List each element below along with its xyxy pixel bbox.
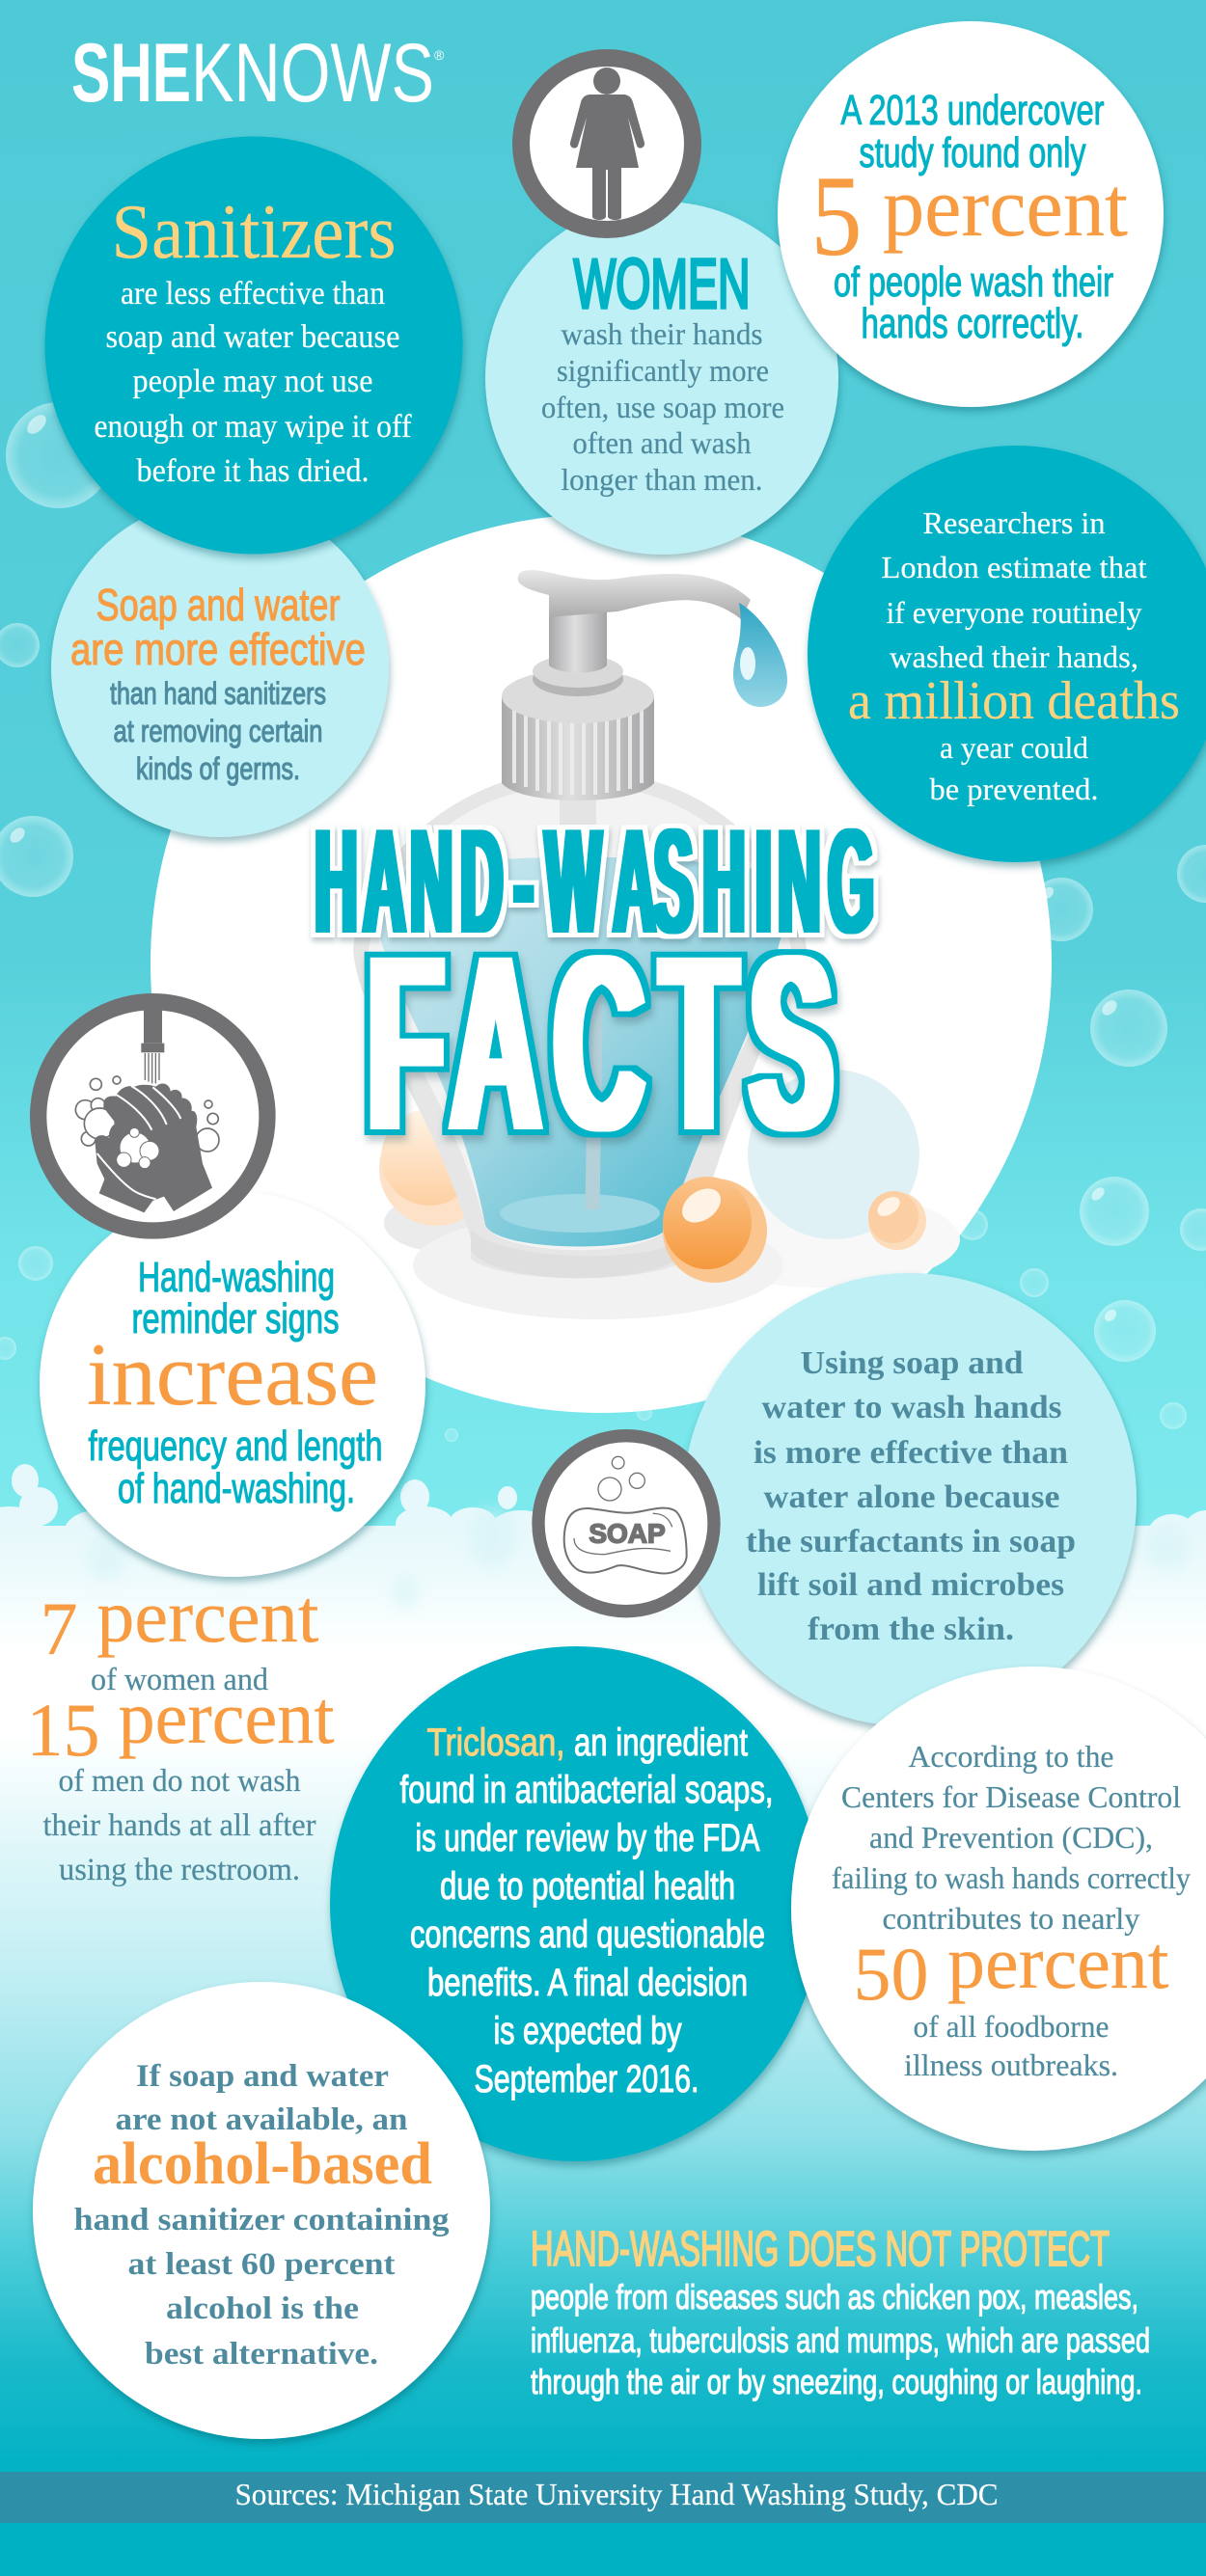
sources band (0, 2472, 1206, 2523)
body text: water alone because (764, 1479, 1059, 1515)
lead text: and Prevention (CDC), (869, 1820, 1153, 1855)
lead text: contributes to nearly (882, 1901, 1140, 1936)
logo: SheKnows: KNOWS (191, 27, 434, 120)
body text: their hands at all after (42, 1808, 316, 1843)
pale large bubble (748, 1070, 919, 1239)
panel: women (485, 202, 838, 555)
logo: SheKnows (71, 27, 445, 120)
closing text: of hand-washing. (118, 1465, 355, 1512)
bottle shadow (384, 1191, 960, 1319)
statistic: percent (928, 1920, 1169, 2004)
body text: is more effective than (754, 1435, 1068, 1471)
icon: hands under faucet (39, 1002, 267, 1231)
body text: from the skin. (808, 1612, 1014, 1647)
lead text (841, 87, 1104, 176)
text: of women and: of women and (91, 1663, 268, 1697)
heading: Sanitizers (112, 190, 396, 275)
sources band: Sources: Michigan State University Hand Washing Study, CDC (235, 2477, 998, 2511)
body text: before it has dried. (137, 453, 369, 489)
closing text: be prevented. (930, 772, 1098, 806)
lead text: Hand-washing (138, 1254, 335, 1301)
closing text (930, 730, 1098, 806)
body text: are less effective than (121, 276, 385, 312)
body text: September 2016. (475, 2058, 699, 2101)
body text: washed their hands, (890, 639, 1138, 674)
panel: 5 percent (778, 21, 1164, 407)
pale orange bubble (379, 1109, 493, 1226)
body text (541, 316, 784, 497)
liquid surface ellipse (500, 1194, 660, 1233)
lead text: study found only (859, 129, 1086, 176)
panel: researchers (808, 446, 1206, 862)
panel: CDC foodborne (791, 1667, 1206, 2151)
bottle base (471, 1230, 687, 1278)
panel: sanitizers (44, 137, 463, 554)
body text: due to potential health (440, 1865, 735, 1908)
closing text (73, 2203, 450, 2372)
body text: water to wash hands (762, 1390, 1061, 1425)
body text: of men do not wash (58, 1764, 301, 1799)
heading (70, 580, 366, 674)
title line: hand-washing: HAND-WASHING (315, 799, 874, 965)
closing text: illness outbreaks. (904, 2047, 1118, 2082)
heading: Soap and water (96, 580, 340, 630)
closing text: at least 60 percent (127, 2247, 396, 2282)
big white circle (151, 514, 1052, 1413)
soap liquid (369, 857, 793, 1246)
body text (110, 676, 326, 786)
lead text: According to the (909, 1739, 1113, 1774)
body text: is expected by (494, 2010, 681, 2052)
heading: are more effective (70, 624, 366, 674)
lead text: A 2013 undercover (841, 87, 1104, 134)
emphasis word: alcohol-based (93, 2131, 432, 2197)
body text: is under review by the FDA (415, 1817, 760, 1859)
body text (531, 2277, 1150, 2401)
body text: often and wash (573, 425, 751, 460)
illustration: soap pump bottle (353, 570, 960, 1319)
logo: SheKnows: SHE (71, 27, 191, 120)
heading: WOMEN (573, 246, 751, 323)
statistic: 15 percent: percent (100, 1675, 335, 1759)
body text: people may not use (133, 364, 372, 399)
body text: often, use soap more (541, 390, 784, 424)
title line: facts: FACTS (368, 905, 833, 1183)
decorative soap bubbles (0, 402, 1206, 1442)
title (315, 799, 874, 1183)
closing text: frequency and length (89, 1423, 382, 1470)
body text (746, 1345, 1076, 1647)
statistic: 15 percent: 15 (27, 1688, 100, 1772)
body text (95, 276, 412, 489)
body text: than hand sanitizers (110, 676, 326, 711)
closing text: alcohol is the (166, 2291, 359, 2326)
lead text (116, 2059, 407, 2137)
lead text: reminder signs (131, 1295, 340, 1342)
lead text: are not available, an (116, 2102, 407, 2137)
lead text: If soap and water (136, 2059, 389, 2094)
statistic: percent (883, 161, 1128, 255)
pump stem (560, 793, 596, 825)
body text: concerns and questionable (410, 1913, 765, 1956)
closing text (834, 258, 1113, 347)
panel: does not protect (531, 2221, 1150, 2401)
body text: lift soil and microbes (757, 1567, 1064, 1603)
closing text: hands correctly. (861, 300, 1084, 347)
glass body (353, 779, 807, 1278)
closing text: hand sanitizer containing (73, 2203, 450, 2237)
emphasis word: increase (87, 1325, 378, 1424)
closing text (89, 1423, 382, 1512)
body text: enough or may wipe it off (95, 409, 412, 445)
pump neck (549, 596, 607, 673)
closing text: of all foodborne (913, 2009, 1110, 2044)
closing text: of people wash their (834, 258, 1113, 306)
soap drip (733, 603, 787, 707)
body text: wash their hands (562, 316, 762, 351)
body text: Researchers in (922, 505, 1106, 540)
statistic (810, 151, 1128, 280)
lead text (832, 1739, 1191, 1936)
statistic: 7 percent: percent (78, 1574, 319, 1658)
body text (882, 505, 1147, 674)
body text: Using soap and (801, 1345, 1024, 1381)
body text: benefits. A final decision (427, 1962, 748, 2004)
closing text (904, 2009, 1118, 2082)
body text (399, 1722, 774, 2101)
body text: if everyone routinely (886, 595, 1142, 630)
body text: at removing certain (114, 714, 322, 748)
icon: soap bar (538, 1436, 714, 1612)
foam and lower background (0, 1464, 1206, 2576)
pump cap (502, 655, 654, 800)
closing text: a year could (940, 730, 1088, 765)
body text: using the restroom. (59, 1853, 300, 1887)
heading word: Triclosan, (426, 1722, 565, 1764)
statistic: 5 (810, 151, 863, 280)
orange bubble large (663, 1177, 767, 1283)
icon: soap bar: SOAP (589, 1518, 666, 1548)
glass inner (369, 793, 791, 1250)
icon: woman figure (521, 58, 693, 230)
pump nozzle (518, 570, 751, 619)
dip tube (592, 964, 596, 1209)
statistic: 50 (853, 1932, 928, 2016)
lead text: failing to wash hands correctly (832, 1860, 1191, 1895)
body text: an ingredient (574, 1722, 748, 1764)
closing text: best alternative. (145, 2337, 378, 2372)
panel: using soap and water (683, 1273, 1137, 1726)
lead text: Centers for Disease Control (841, 1779, 1181, 1814)
statistic: 7 percent: 7 (41, 1586, 78, 1670)
panel: hand-washing reminder signs (40, 1191, 425, 1577)
body text: London estimate that (882, 550, 1147, 584)
lead text (131, 1254, 340, 1342)
body text: found in antibacterial soaps, (399, 1769, 774, 1811)
panel: triclosan (330, 1646, 822, 2161)
logo: SheKnows: ® (434, 47, 445, 63)
panel: soap and water (51, 500, 389, 837)
body text: longer than men. (562, 462, 762, 497)
body text: significantly more (557, 353, 769, 388)
body text: soap and water because (106, 319, 399, 355)
orange bubble small (868, 1191, 926, 1250)
body text (42, 1764, 316, 1887)
body text: kinds of germs. (136, 751, 300, 786)
statistic: a million deaths (848, 671, 1180, 731)
panel: alcohol-based sanitizer (33, 1982, 490, 2439)
panel: 7 and 15 percent (27, 1574, 335, 1887)
body text: the surfactants in soap (746, 1524, 1076, 1559)
